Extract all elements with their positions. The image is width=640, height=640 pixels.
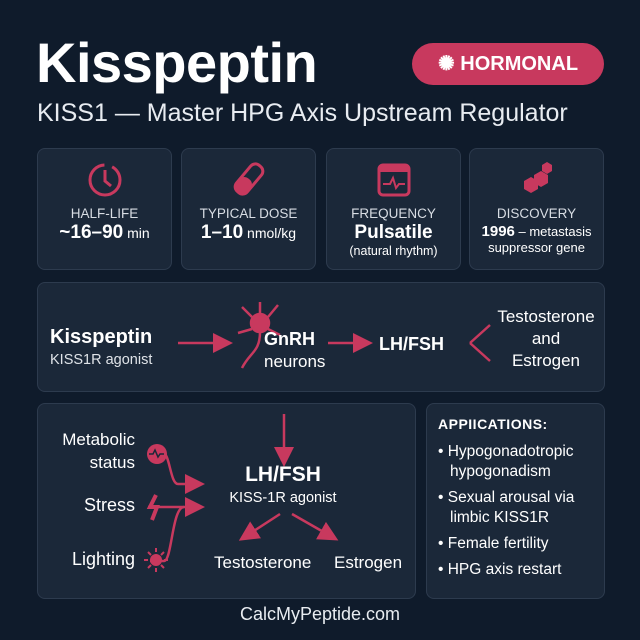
labels: inputs: status	[90, 453, 135, 472]
labels: inputs: Metabolic	[62, 430, 135, 449]
list: • Female fertility	[438, 535, 549, 552]
icon: vial	[234, 162, 264, 196]
list: • HPG axis restart	[438, 561, 561, 578]
panel: regulation: KISS-1R agonist	[229, 490, 337, 506]
icon: metabolic	[147, 444, 167, 464]
panel: regulation: Estrogen	[334, 553, 402, 572]
icon: neuron	[238, 302, 280, 368]
text: LH/FSH center: LH/FSH	[245, 463, 321, 486]
footer: CalcMyPeptide.com	[240, 604, 400, 624]
subtitle: KISS1 — Master HPG Axis Upstream Regulator	[37, 99, 568, 127]
card: frequency	[326, 148, 461, 270]
icon: calendar pulse	[378, 164, 410, 196]
card: half-life: HALF-LIFE	[71, 206, 138, 221]
text: hormones	[497, 307, 595, 370]
panel: pathway flow: KISS1R agonist	[50, 352, 152, 368]
card: discovery	[469, 148, 604, 270]
card: half-life: ~16–90 min	[59, 222, 150, 243]
card: frequency: (natural rhythm)	[349, 244, 438, 258]
badge: ✺ HORMONAL	[438, 53, 578, 75]
card: discovery: DISCOVERY	[497, 206, 576, 221]
icon: molecule	[524, 162, 552, 193]
panel: regulation: Lighting	[72, 549, 135, 569]
badge	[412, 43, 604, 85]
icon: sun	[144, 548, 168, 572]
text: hormones: and	[532, 329, 560, 348]
text: hormones: Testosterone	[497, 307, 595, 326]
card: frequency: Pulsatile	[354, 222, 433, 243]
panel: regulation	[37, 403, 416, 599]
outputs: Testosterone	[214, 553, 311, 572]
icon: clock	[88, 164, 122, 196]
arrows	[178, 302, 491, 368]
card: dose	[181, 148, 316, 270]
card: discovery: 1996 – metastasis	[482, 223, 591, 240]
card: dose: 1–10 nmol/kg	[201, 222, 296, 243]
list: • Hypogonadotropic hypogonadism	[438, 443, 574, 480]
card: discovery: suppressor gene	[488, 240, 585, 255]
list: • Sexual arousal via limbic KISS1R	[438, 489, 574, 526]
title: Kisspeptin	[36, 31, 317, 94]
labels: inputs	[62, 430, 135, 472]
icon: lightning	[150, 495, 157, 520]
panel: applications: APPIICATIONS:	[438, 416, 548, 432]
card: frequency: FREQUENCY	[351, 206, 436, 221]
panel: pathway flow	[37, 282, 605, 392]
panel: pathway flow: neurons	[264, 352, 325, 371]
card: half-life	[37, 148, 172, 270]
panel: regulation: Stress	[84, 495, 135, 515]
text: kisspeptin: Kisspeptin	[50, 326, 152, 348]
list	[438, 443, 574, 578]
card: dose: TYPICAL DOSE	[200, 206, 297, 221]
panel: applications	[426, 403, 605, 599]
text: LH/FSH: LH/FSH	[379, 334, 444, 354]
text: GnRH: GnRH	[264, 329, 315, 349]
text: hormones: Estrogen	[512, 351, 580, 370]
